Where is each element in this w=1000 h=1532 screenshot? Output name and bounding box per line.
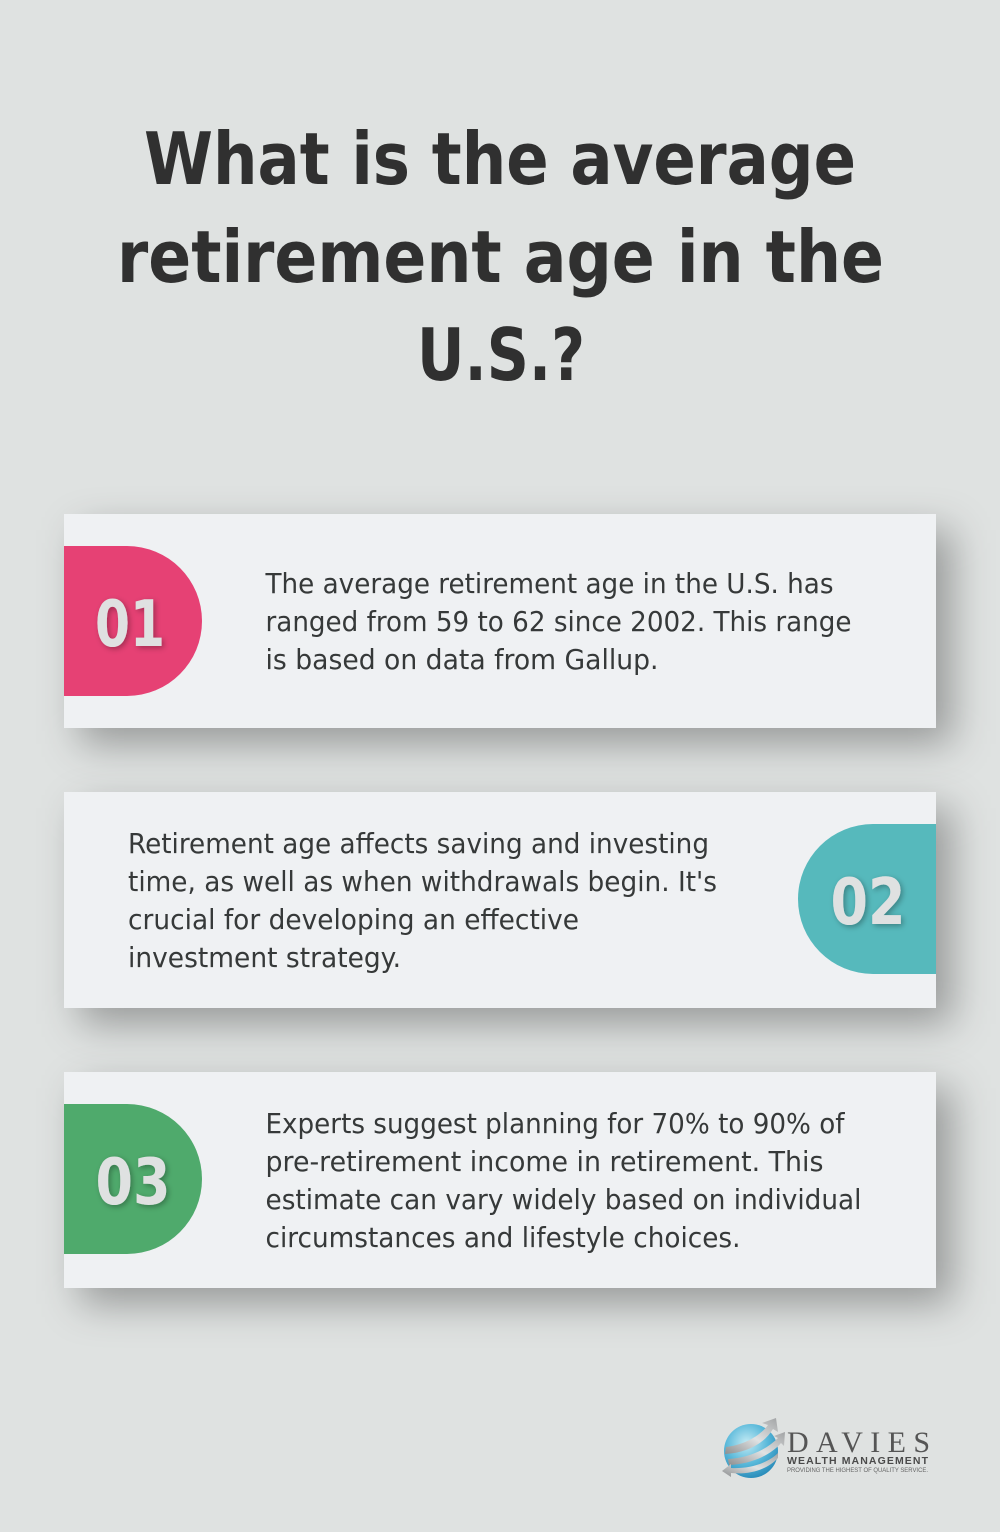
logo: Davies Wealth Management (722, 1418, 930, 1478)
logo subtitle: WEALTH MANAGEMENT (787, 1455, 929, 1467)
title: retirement age in the (117, 215, 884, 299)
panel: card 02 (64, 792, 952, 1024)
logo tagline: PROVIDING THE HIGHEST OF QUALITY SERVICE. (787, 1468, 928, 1474)
text block: card 03 (266, 1108, 862, 1254)
text block: card 01: The average retirement age in the U.S. has (265, 568, 833, 600)
text block: card 03: estimate can vary widely based on individual (266, 1184, 862, 1216)
text block: card 01 (265, 568, 851, 676)
text block: card 02: crucial for developing an effective (128, 904, 579, 936)
text block: card 03: circumstances and lifestyle choices. (266, 1222, 740, 1254)
panel: card 03 (64, 1072, 952, 1304)
panel: card 01 (64, 514, 952, 744)
badge: 01: 01 (95, 588, 165, 662)
title (117, 117, 884, 397)
text block: card 03: pre-retirement income in retirement. This (266, 1146, 824, 1178)
text block: card 03: Experts suggest planning for 70% to 90% of (266, 1108, 846, 1140)
icon: globe with arrows (722, 1418, 785, 1478)
badge: 01 (64, 546, 202, 696)
text block: card 01: ranged from 59 to 62 since 2002. This range (266, 606, 852, 638)
badge: 02 (798, 824, 936, 974)
badge: 03: 03 (96, 1146, 170, 1220)
text block: card 02: Retirement age affects saving and investing (128, 828, 709, 860)
text block: card 02: investment strategy. (128, 942, 401, 974)
title: What is the average (144, 117, 856, 201)
badge: 03 (64, 1104, 202, 1254)
text block: card 02: time, as well as when withdrawals begin. It's (128, 866, 717, 898)
badge: 02: 02 (830, 866, 906, 940)
title: U.S.? (417, 313, 585, 397)
logo wordmark: DAVIES (787, 1426, 930, 1459)
text block: card 02 (128, 828, 717, 974)
text block: card 01: is based on data from Gallup. (266, 644, 658, 676)
